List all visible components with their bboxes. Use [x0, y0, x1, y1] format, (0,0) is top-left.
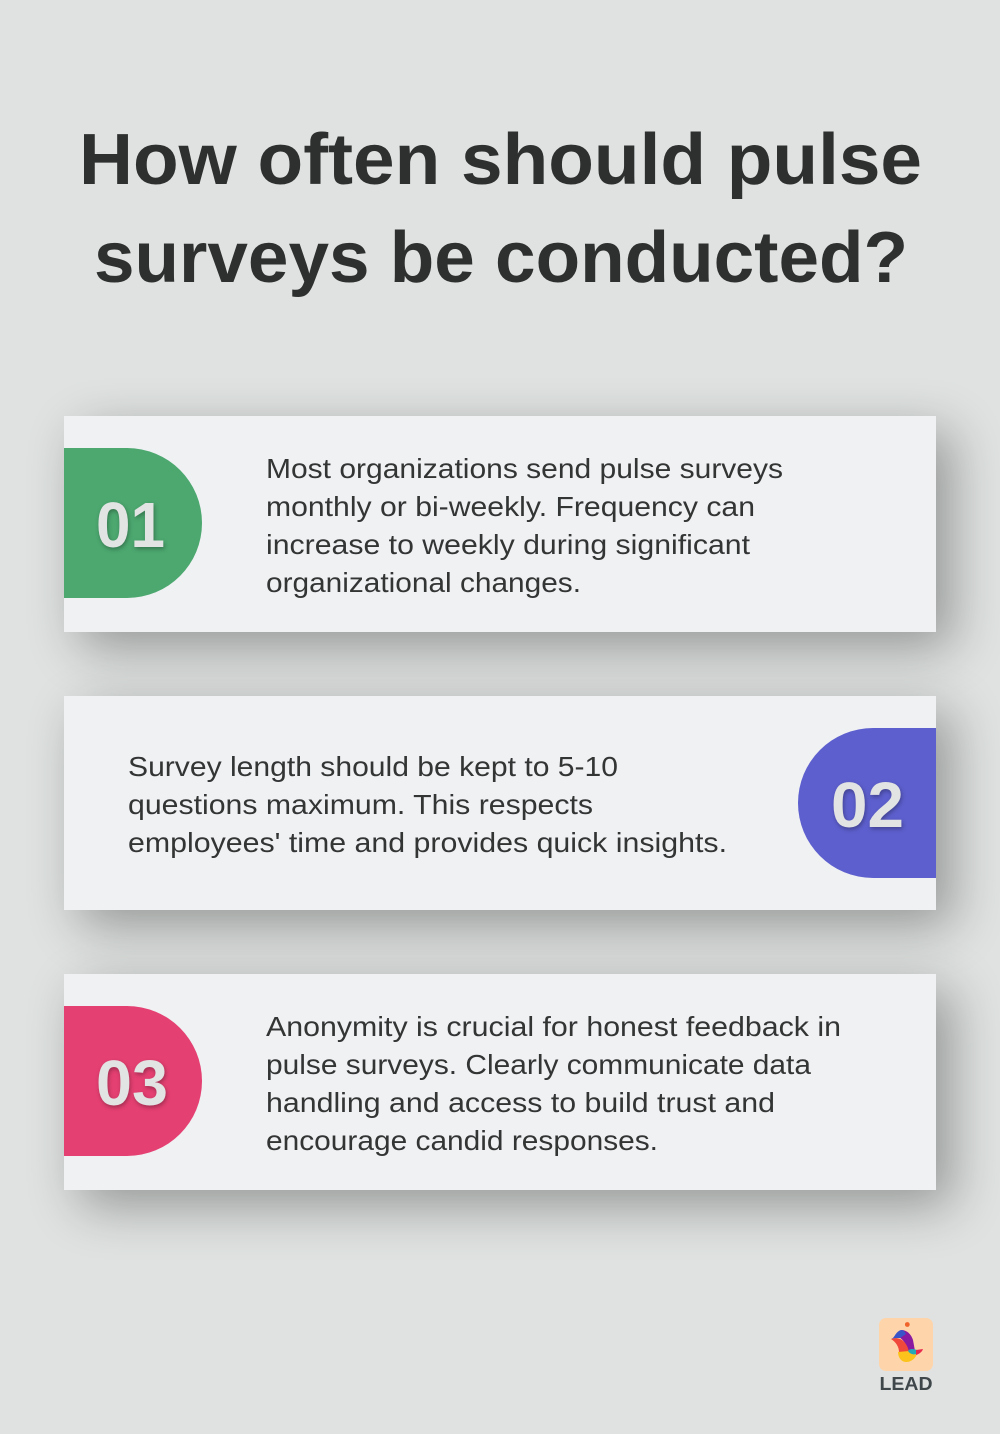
text: step 01 description — [266, 453, 783, 598]
text: step 02 description: questions maximum. This respects — [128, 789, 593, 820]
logo: LEAD — [879, 1318, 933, 1394]
panel: step 01 — [64, 416, 936, 632]
text: LEAD wordmark: LEAD — [880, 1374, 932, 1394]
text: step 01 description: Most organizations send pulse surveys — [266, 453, 783, 484]
text: step 02 description: employees' time and provides quick insights. — [128, 827, 727, 858]
text: step 01 description: monthly or bi-weekly. Frequency can — [266, 491, 755, 522]
icon: bird mark — [891, 1322, 923, 1362]
badge: 03 — [64, 1006, 202, 1156]
badge: 02 — [798, 728, 936, 878]
text: step 02 description: Survey length should be kept to 5-10 — [128, 751, 618, 782]
text: step 03 description: handling and access to build trust and — [266, 1087, 775, 1118]
text: step 03 description: Anonymity is crucial for honest feedback in — [266, 1011, 841, 1042]
badge: 01: 01 — [96, 489, 165, 561]
text: step 01 description: organizational changes. — [266, 567, 581, 598]
panel: step 02 — [64, 696, 936, 910]
badge: 02: 02 — [831, 769, 904, 841]
text: step 03 description: pulse surveys. Clearly communicate data — [266, 1049, 811, 1080]
badge: 01 — [64, 448, 202, 598]
text: step 03 description: encourage candid responses. — [266, 1125, 658, 1156]
text: step 02 description — [128, 751, 727, 858]
title: How often should pulse — [79, 120, 922, 200]
icon: logo tile — [879, 1318, 933, 1371]
badge: 03: 03 — [96, 1047, 168, 1119]
title — [79, 120, 922, 298]
text: step 01 description: increase to weekly during significant — [266, 529, 750, 560]
title: surveys be conducted? — [94, 218, 908, 298]
text: step 03 description — [266, 1011, 841, 1156]
panel: step 03 — [64, 974, 936, 1190]
